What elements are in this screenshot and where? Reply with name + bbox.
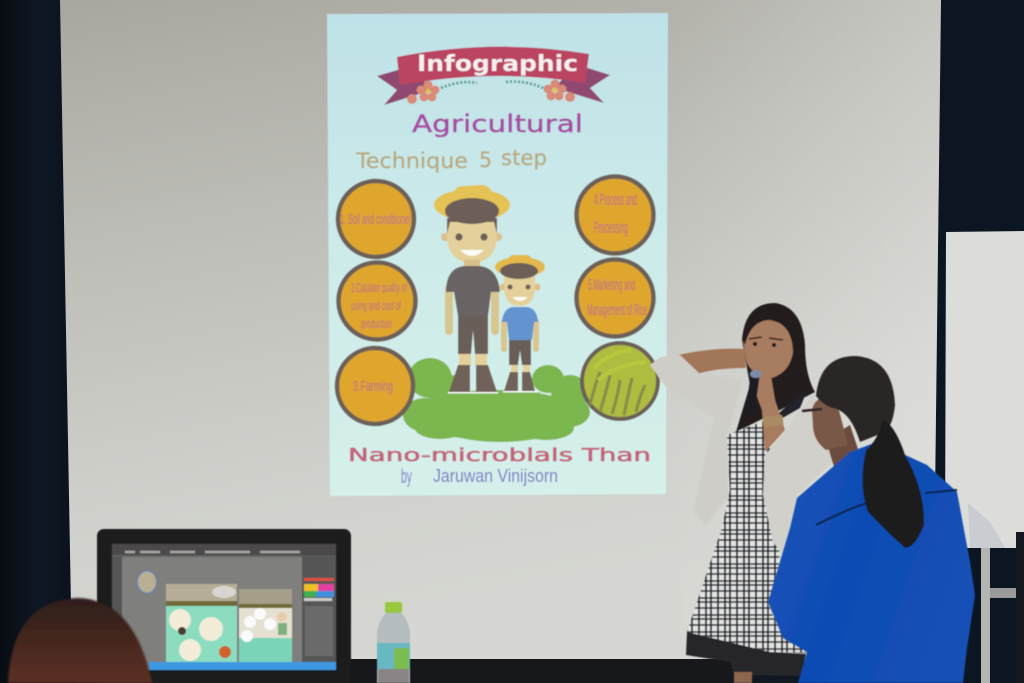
step 1 circle — [338, 181, 414, 257]
step 4 circle — [576, 176, 654, 254]
infographic poster: 1. Soil and conditioner — [340, 211, 411, 228]
neck — [826, 425, 860, 470]
monitor — [97, 529, 351, 683]
whiteboard — [945, 231, 1024, 683]
monitor screen — [112, 544, 336, 670]
audience head — [8, 598, 152, 683]
step 5 circle — [576, 260, 654, 336]
farmer adult — [434, 185, 510, 394]
farmer child — [495, 255, 545, 392]
infographic poster — [327, 13, 668, 496]
step 3 circle: 3.Farming — [353, 378, 393, 395]
jacket right — [763, 394, 840, 555]
skirt lining — [686, 632, 806, 676]
shorts — [458, 316, 488, 354]
presenter woman — [650, 303, 840, 683]
infographic poster: Management of Rice — [587, 302, 647, 319]
credit: by Jaruwan Vinijsorn: by — [401, 466, 412, 488]
heading: Technique 5 step: step — [501, 146, 547, 170]
boots — [449, 365, 470, 392]
jacket left — [650, 355, 743, 525]
dress neckline — [770, 388, 808, 425]
left curtain — [0, 0, 74, 683]
rice field photo circle — [582, 343, 658, 419]
leaf sprigs — [441, 82, 543, 88]
heading: Technique 5 step — [355, 146, 547, 173]
heading: Technique 5 step: Technique — [355, 149, 468, 173]
credit: by Jaruwan Vinijsorn — [401, 466, 558, 488]
credit: by Jaruwan Vinijsorn: Jaruwan Vinijsorn — [433, 466, 558, 486]
step 4 circle: Processing — [594, 218, 628, 237]
step 4 circle: 4.Process and — [594, 190, 637, 209]
face — [441, 233, 449, 241]
line: Nano-microblals Than: Nano-microblals Than — [348, 445, 651, 466]
glasses — [802, 409, 822, 411]
heading: Agricultural: Agricultural — [412, 110, 583, 138]
ribbon banner — [377, 47, 610, 105]
step 2 circle: production — [361, 317, 392, 331]
microphone — [745, 372, 760, 418]
table edge — [340, 659, 740, 683]
watch — [762, 415, 784, 427]
face — [743, 320, 793, 378]
shirt — [446, 266, 500, 316]
colour swatches — [304, 578, 334, 601]
arms — [445, 285, 453, 335]
right curtain — [930, 0, 1024, 683]
leaf logo — [138, 571, 156, 593]
step 2 circle: 2.Calulate quality of — [351, 281, 407, 295]
title: Infographic: Infographic — [417, 52, 578, 77]
hat — [434, 189, 510, 221]
step 2 circle — [338, 262, 416, 340]
raised arm — [678, 349, 746, 374]
step 2 circle: using and cost of — [351, 299, 401, 313]
flowers — [407, 80, 575, 104]
dress — [687, 420, 807, 653]
forearm and hand — [750, 369, 785, 452]
artboard left — [166, 584, 237, 662]
taskbar — [149, 662, 336, 670]
audience woman in blue jacket — [768, 356, 975, 683]
legs — [734, 672, 752, 683]
head hair — [816, 356, 895, 442]
water bottle — [377, 602, 410, 683]
step 5 circle: 5.Marketing and — [588, 277, 635, 294]
step 3 circle — [337, 348, 413, 424]
hair back — [736, 303, 815, 432]
face — [812, 395, 848, 450]
ponytail — [862, 420, 924, 548]
artboard right — [239, 589, 292, 662]
heading: Technique 5 step: 5 — [479, 148, 492, 172]
green grass blob — [403, 358, 590, 442]
jacket seam — [816, 490, 957, 525]
jacket — [768, 442, 975, 683]
